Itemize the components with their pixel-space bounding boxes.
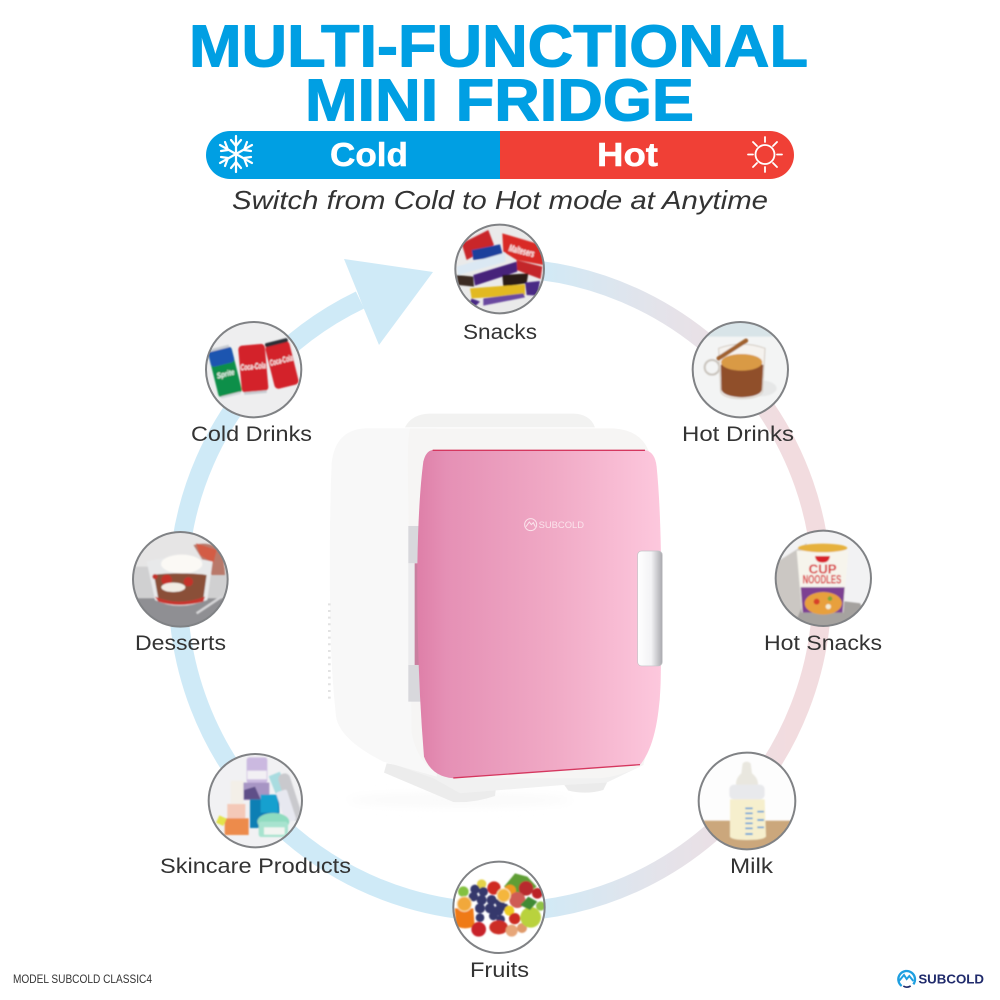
brand logo xyxy=(898,971,984,987)
mini fridge xyxy=(329,414,662,806)
item: hot drinks xyxy=(690,320,790,417)
item: cold drinks: Sprite xyxy=(216,367,236,381)
label: cold drinks: Cold Drinks xyxy=(191,423,312,446)
brand logo: SUBCOLD xyxy=(918,973,984,987)
left hinges xyxy=(408,526,420,702)
mode switch bar: cold and hot: Hot xyxy=(597,136,658,173)
item: hot snacks xyxy=(775,531,873,627)
title: MINI FRIDGE xyxy=(305,68,694,134)
item: cold drinks xyxy=(206,322,301,417)
label: fruits: Fruits xyxy=(470,959,529,982)
mode switch bar: cold and hot xyxy=(206,131,794,179)
door seals xyxy=(433,450,645,778)
label: milk: Milk xyxy=(730,855,774,878)
item: milk xyxy=(697,753,797,851)
label: desserts: Desserts xyxy=(135,632,226,655)
door logo xyxy=(525,519,585,531)
icon: sun xyxy=(748,137,782,172)
body side xyxy=(330,428,437,777)
title xyxy=(189,14,808,134)
base band xyxy=(383,753,644,793)
door logo: SUBCOLD xyxy=(539,520,585,530)
item: snacks: Maltesers xyxy=(508,243,536,260)
item: hot snacks: NOODLES xyxy=(803,572,841,586)
arrow head xyxy=(344,259,433,345)
vents xyxy=(325,603,333,700)
item: hot snacks: CUP xyxy=(809,561,837,576)
right foot xyxy=(558,777,610,793)
item: cold drinks: Coca-Cola xyxy=(240,360,266,372)
door xyxy=(417,450,661,778)
icon: snowflake xyxy=(220,136,252,172)
model note: MODEL SUBCOLD CLASSIC4 xyxy=(13,974,153,986)
item: snacks xyxy=(455,225,544,313)
subtitle: Switch from Cold to Hot mode at Anytime xyxy=(232,185,768,215)
label: skincare products: Skincare Products xyxy=(160,855,351,878)
label: hot snacks: Hot Snacks xyxy=(764,632,882,655)
label: hot drinks: Hot Drinks xyxy=(682,423,794,446)
floor shadow xyxy=(347,794,573,806)
label: snacks: Snacks xyxy=(463,321,537,344)
front frame xyxy=(408,428,660,778)
mode switch bar: cold and hot: Cold xyxy=(330,136,408,173)
item: cold drinks: Coca-Cola xyxy=(269,353,294,368)
item: desserts xyxy=(130,530,230,628)
item: fruits xyxy=(453,862,545,953)
item: skincare products xyxy=(209,754,303,847)
left foot xyxy=(384,763,497,802)
title: MULTI-FUNCTIONAL xyxy=(189,14,808,80)
door handle xyxy=(638,551,662,666)
top carry handle xyxy=(405,414,595,427)
circular arrow ring xyxy=(178,259,822,912)
